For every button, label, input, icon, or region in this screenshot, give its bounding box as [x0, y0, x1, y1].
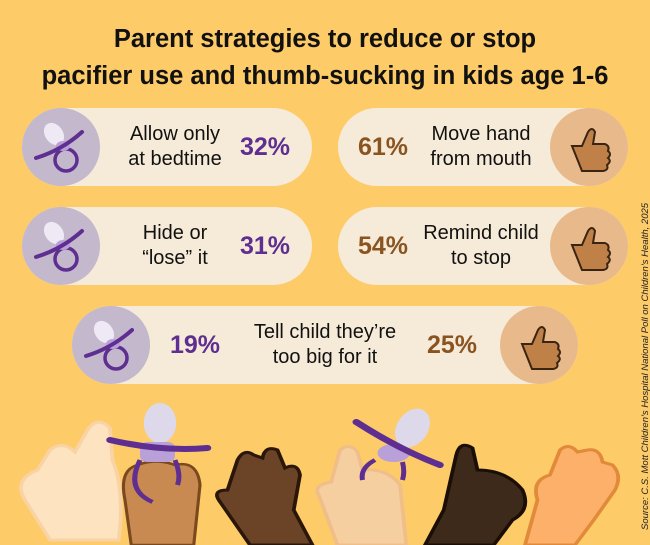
panel: move hand from mouth — [338, 108, 628, 186]
hand 5 dark thumbs up — [425, 445, 525, 545]
panel: hide or lose it — [22, 207, 312, 285]
text: Remind child — [423, 222, 539, 244]
text: to stop — [451, 247, 511, 269]
title: Parent strategies to reduce or stop — [114, 25, 536, 53]
text: Hide or — [143, 222, 207, 244]
text: “lose” it — [142, 247, 208, 269]
text — [254, 321, 396, 368]
illustration: hands — [19, 403, 620, 545]
icon: pacifier — [72, 306, 150, 384]
text: at bedtime — [128, 148, 222, 170]
title: pacifier use and thumb-sucking in kids age 1-6 — [42, 62, 608, 90]
panel: allow only at bedtime — [22, 108, 312, 186]
hand 3 dark open — [217, 449, 312, 545]
text — [423, 222, 539, 269]
percentage pacifier: 19% — [170, 330, 220, 358]
icon: pacifier — [22, 108, 100, 186]
title — [42, 25, 608, 90]
percentage: 31% — [240, 232, 290, 260]
percentage: 32% — [240, 132, 290, 160]
text — [430, 123, 532, 170]
text: too big for it — [273, 346, 377, 368]
hand 2 fist with pacifier — [110, 403, 208, 545]
text — [142, 222, 208, 269]
icon: thumbs up — [550, 207, 628, 285]
icon: thumbs up — [550, 108, 628, 186]
percentage thumb: 25% — [427, 330, 477, 358]
icon: thumbs up — [500, 306, 578, 384]
text — [128, 123, 222, 170]
text: Allow only — [130, 123, 220, 145]
text: from mouth — [430, 148, 532, 170]
text: Move hand — [432, 123, 530, 145]
panel: remind child to stop — [338, 207, 628, 285]
hand 4 light with pacifier — [317, 405, 440, 545]
text: Tell child they’re — [254, 321, 396, 343]
hand 6 orange open — [525, 446, 618, 545]
hand 1 light — [21, 422, 121, 540]
icon: pacifier — [22, 207, 100, 285]
percentage: 61% — [358, 132, 408, 160]
percentage: 54% — [358, 232, 408, 260]
panel: tell child they're too big — [72, 306, 578, 384]
